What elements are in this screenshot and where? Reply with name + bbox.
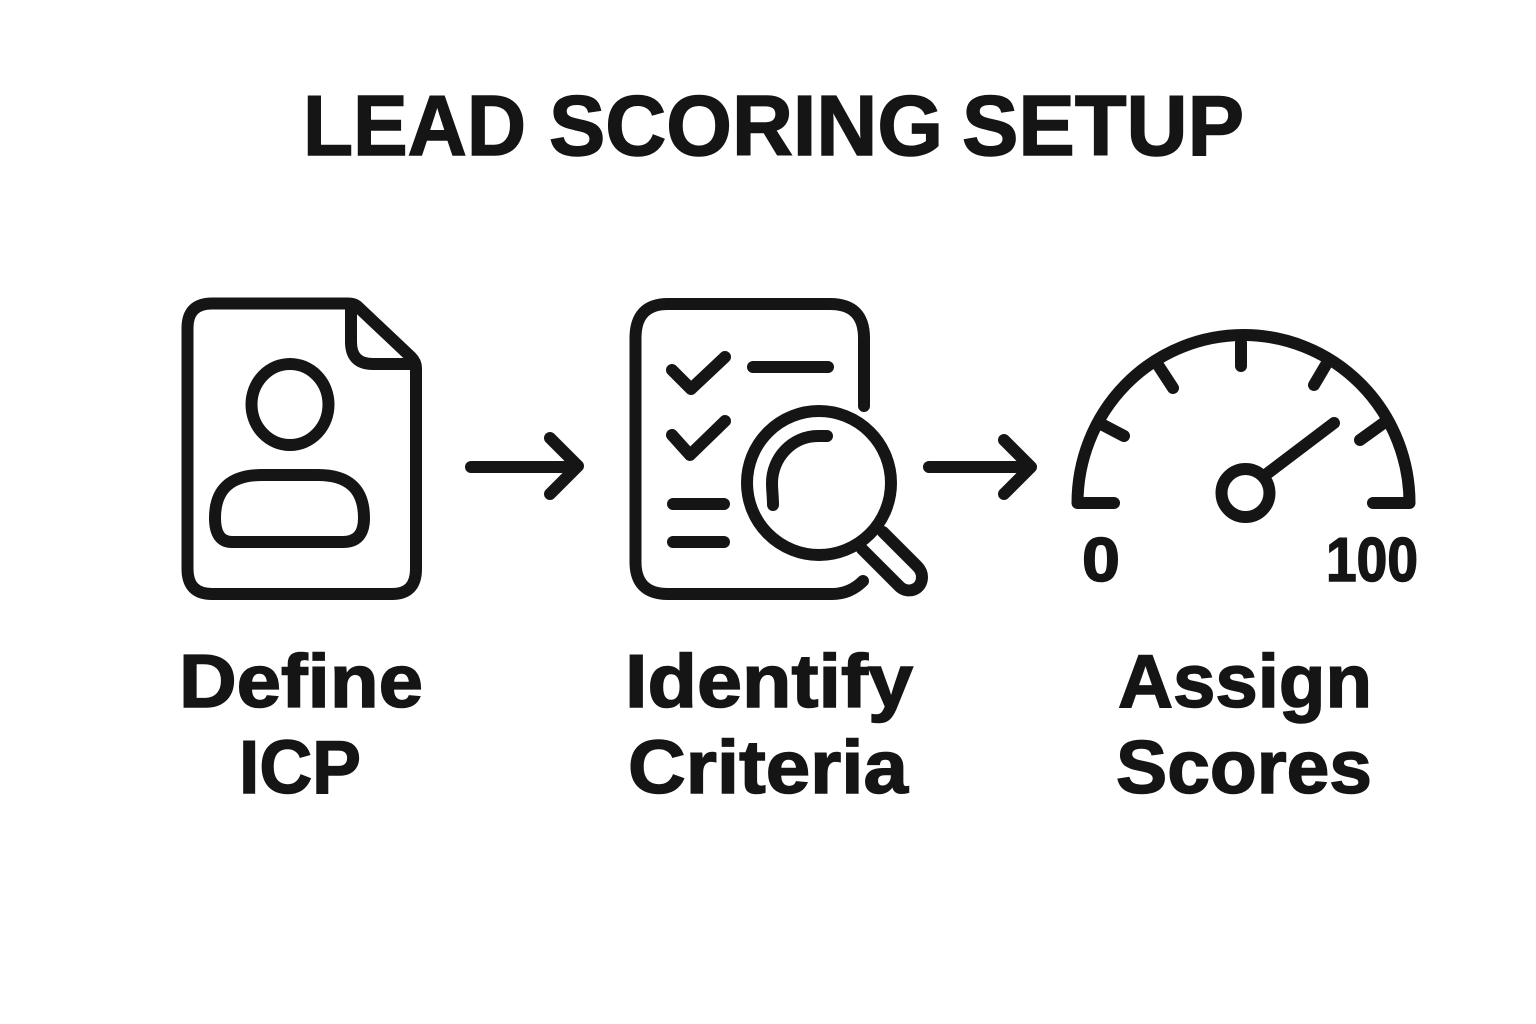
title: SCORING — [549, 79, 943, 174]
label: Identify Criteria: Identify — [625, 639, 913, 723]
label: Assign Scores: Assign — [1118, 639, 1372, 723]
label: Define ICP — [179, 639, 423, 809]
label: Identify Criteria: Criteria — [628, 725, 909, 809]
label: Assign Scores: Scores — [1116, 725, 1372, 809]
icon: criteria checklist with magnifier — [636, 304, 922, 594]
label: Assign Scores — [1116, 639, 1372, 809]
arrow: ICP to criteria — [471, 438, 578, 494]
icon: ICP document with person — [188, 304, 416, 594]
arrow: criteria to scores — [929, 440, 1031, 494]
title: LEAD — [303, 79, 526, 174]
label: Define ICP: Define — [179, 639, 423, 723]
label: Define ICP: ICP — [239, 725, 361, 809]
gauge label: 0: 0 — [1082, 526, 1120, 595]
title: SETUP — [962, 79, 1244, 174]
label: Identify Criteria — [625, 639, 913, 809]
gauge label: 100: 100 — [1326, 526, 1418, 595]
icon: gauge 0 to 100 — [1078, 335, 1410, 517]
title — [303, 79, 1244, 174]
